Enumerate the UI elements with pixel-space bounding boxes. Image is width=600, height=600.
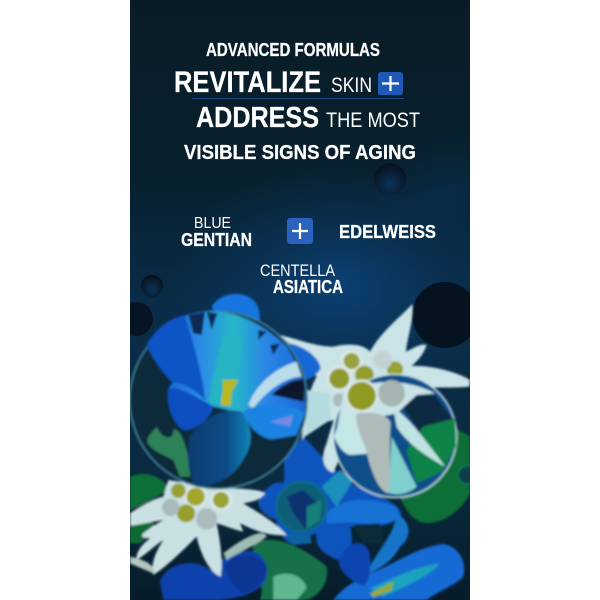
gentian magnifying lens <box>130 294 321 489</box>
label: blue gentian: GENTIAN <box>181 230 252 250</box>
edelweiss lower left <box>130 480 287 577</box>
edelweiss lens ring <box>333 374 457 498</box>
heading: address the most <box>196 102 420 134</box>
label: centella asiatica: CENTELLA <box>260 261 336 280</box>
label: blue gentian <box>181 215 252 250</box>
heading: revitalize skin: REVITALIZE <box>174 66 321 99</box>
label: centella asiatica: ASIATICA <box>273 277 343 297</box>
heading: revitalize skin: SKIN <box>331 74 372 97</box>
label: blue gentian: BLUE <box>194 215 231 232</box>
edelweiss upper right <box>280 304 470 490</box>
green leaves <box>130 420 470 600</box>
lower blue gentian cluster <box>160 437 464 600</box>
label: centella asiatica <box>260 261 343 297</box>
panel: dark blue background <box>130 0 470 600</box>
heading: address the most: ADDRESS <box>196 102 319 134</box>
decorative dark orbs <box>119 163 478 348</box>
small glass bubble <box>277 482 327 545</box>
right edge bubble <box>456 464 470 486</box>
heading: visible signs of aging: VISIBLE SIGNS OF AGING <box>184 142 416 164</box>
label: edelweiss: EDELWEISS <box>339 222 436 242</box>
heading: address the most: THE MOST <box>326 109 420 132</box>
icon: plus badge <box>378 72 403 95</box>
icon: plus badge between ingredients <box>287 218 313 244</box>
divider line <box>192 98 404 99</box>
botanical illustration <box>130 294 477 600</box>
heading: advanced formulas: ADVANCED FORMULAS <box>206 40 380 60</box>
